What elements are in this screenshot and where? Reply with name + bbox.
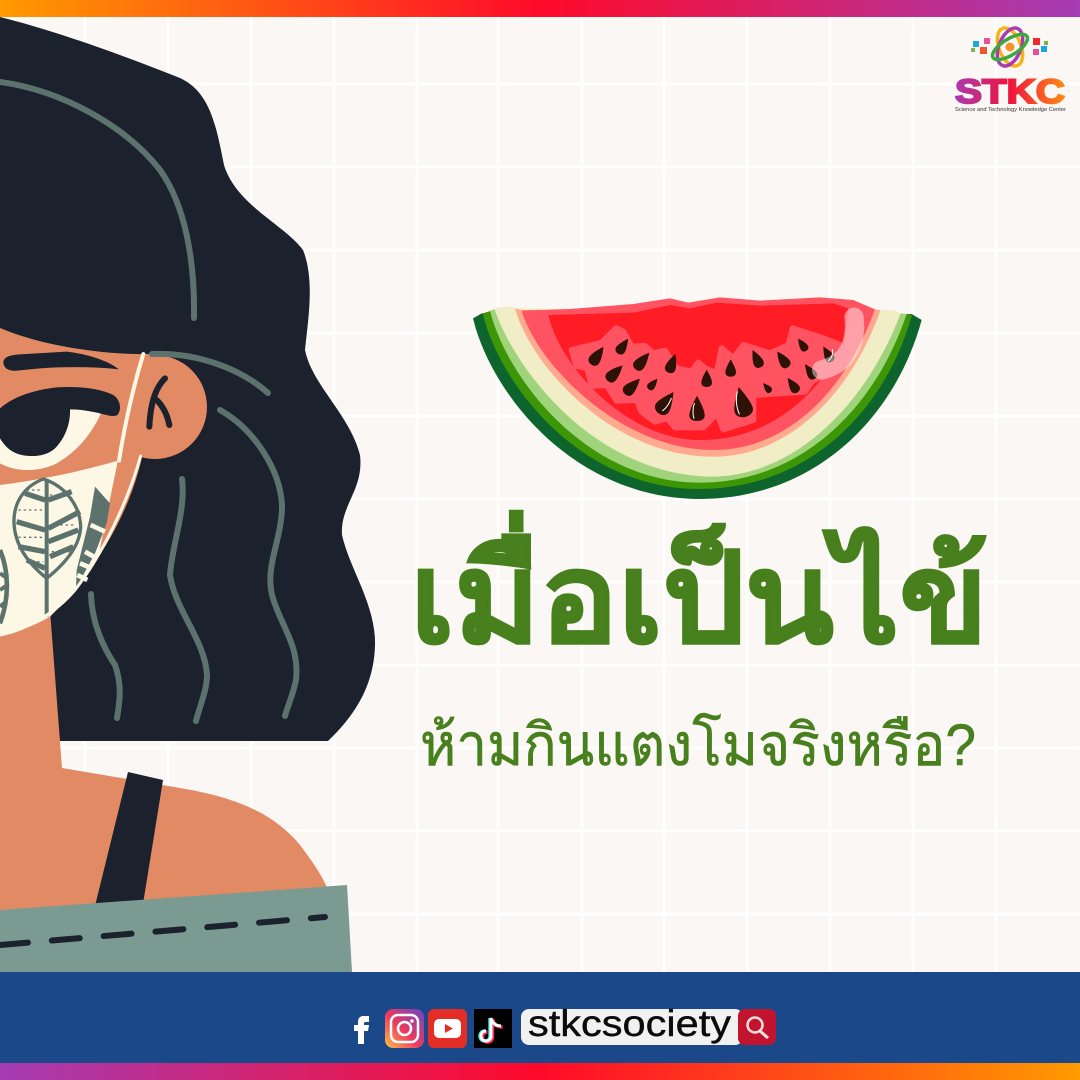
shirt (0, 885, 352, 972)
bottom gradient bar (0, 1063, 1080, 1080)
face (0, 328, 150, 640)
logo: STKC (955, 24, 1066, 113)
illustration: woman wearing a mask (0, 17, 375, 972)
logo pixels (971, 38, 1048, 55)
clothing strap (94, 772, 163, 910)
top gradient bar (0, 0, 1080, 17)
watermelon peach edge (515, 308, 881, 457)
subtitle: ห้ามกินแตงโมจริงหรือ? (420, 712, 976, 778)
watermelon highlight (822, 317, 855, 370)
logo tagline: Science and Technology Knowledge Center (955, 107, 1066, 113)
watermelon seeds (586, 336, 836, 421)
icon: facebook (354, 1016, 369, 1044)
search handle: stkcsociety (528, 1003, 732, 1044)
watermelon rind light green (490, 308, 907, 483)
watermelon pink flesh (522, 297, 875, 450)
shirt stitching (0, 917, 325, 945)
watermelon red flesh (548, 303, 848, 440)
logo wordmark: STKC (955, 73, 1065, 111)
icon: youtube (428, 1009, 467, 1048)
hair (0, 17, 375, 741)
ear detail (149, 378, 169, 427)
watermelon rind dark (473, 313, 922, 499)
watermelon cream flesh (494, 307, 901, 477)
hair strands (0, 82, 297, 721)
watermelon rind green (483, 311, 912, 489)
mask strap lower (0, 456, 141, 635)
eyebrow (3, 352, 119, 371)
mask leaf pattern (0, 479, 110, 623)
face details and mask (0, 352, 169, 635)
social row (354, 1003, 776, 1048)
eye upper lid and pupil (0, 387, 120, 456)
logo atom icon (989, 24, 1031, 70)
icon: search (738, 1009, 776, 1045)
ear (103, 355, 207, 459)
footer band (0, 972, 1080, 1063)
search pill (521, 1009, 743, 1045)
title: เมื่อเป็นไข้ (410, 510, 988, 669)
icon: tiktok (474, 1009, 512, 1048)
seed glints (663, 349, 833, 418)
mask (0, 461, 117, 635)
mask strap upper (119, 354, 143, 461)
watermelon pink centre (572, 328, 840, 429)
neck and shoulder (0, 610, 330, 915)
watermelon slice (473, 297, 922, 499)
eye white (0, 407, 101, 470)
icon: instagram (385, 1009, 424, 1048)
